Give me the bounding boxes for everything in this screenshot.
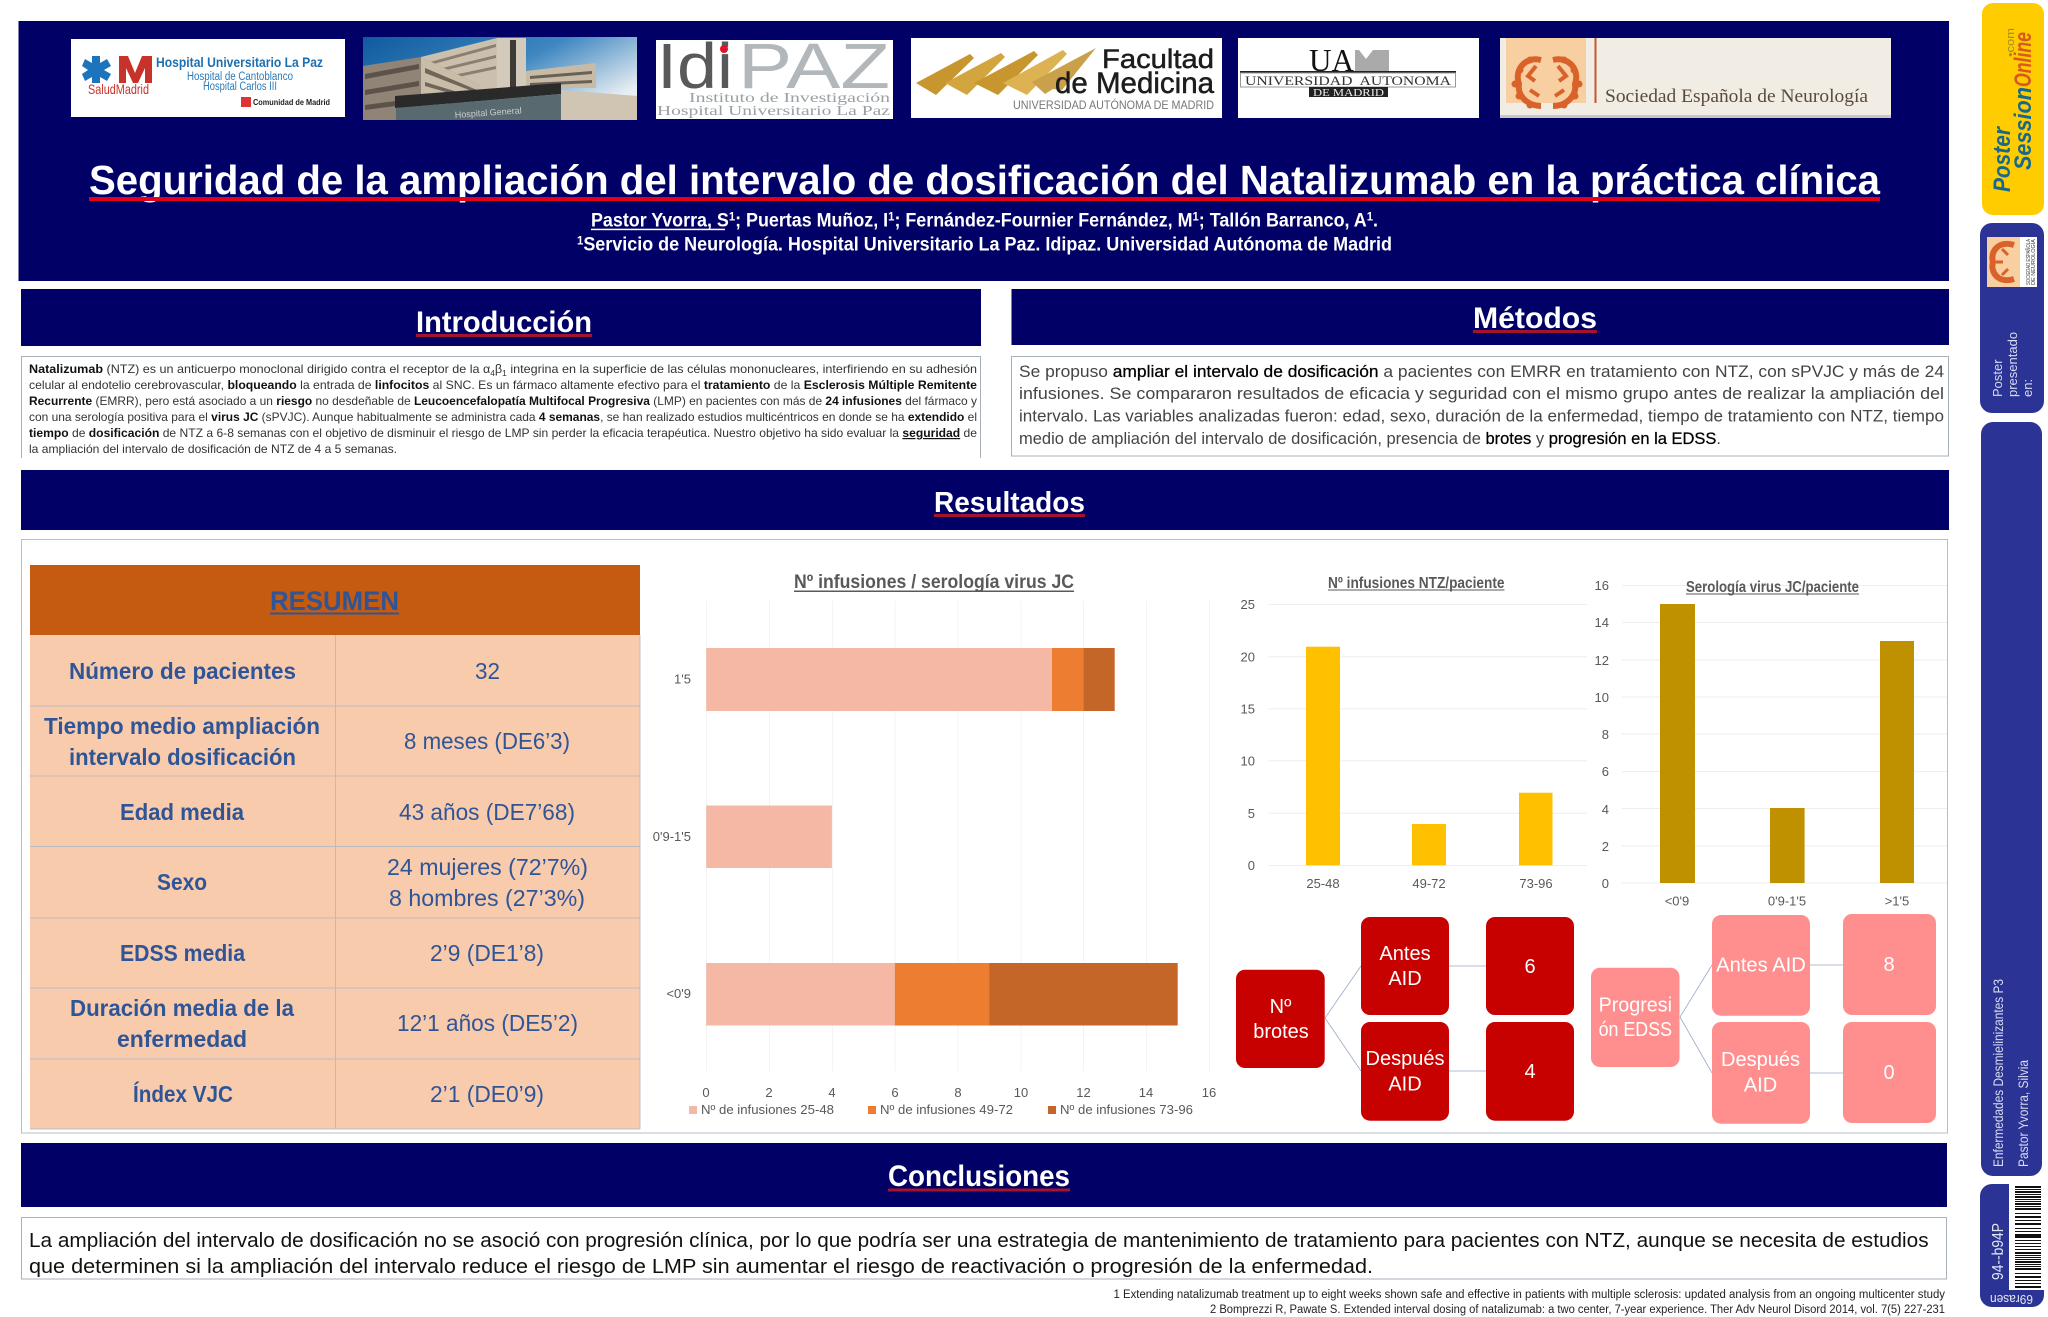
chart: Serología virus JC/paciente: 2 bbox=[1602, 839, 1609, 854]
logo: Universidad Autónoma de Madrid: DE MADRID bbox=[1313, 88, 1384, 99]
table: resumen: Duración media de la bbox=[70, 995, 294, 1021]
chart: Serología virus JC/paciente: 4 bbox=[1602, 802, 1609, 817]
table: resumen: 2’1 (DE0’9) bbox=[430, 1081, 544, 1107]
sidebar: poster presentado en: Poster bbox=[1990, 359, 2005, 397]
chart: Nº infusiones / serología virus JC: 16 bbox=[1202, 1085, 1216, 1100]
logo: IdiPAZ: Idi bbox=[657, 30, 733, 102]
diagram: Nº brotes: 4 bbox=[1524, 1061, 1536, 1083]
sidebar: session and author: Pastor Yvorra, Silvia bbox=[2015, 1060, 2031, 1167]
logo: Sociedad Española de Neurología: Sociedad Española de Neurología bbox=[1605, 86, 1869, 107]
diagram: Progresión EDSS: Después bbox=[1721, 1049, 1800, 1071]
sidebar: session and author bbox=[1981, 422, 2042, 1176]
table: resumen: Número de pacientes bbox=[69, 658, 296, 684]
table: resumen: RESUMEN bbox=[270, 586, 399, 616]
panel: métodos text: infusiones. Se compararon resultados de eficacia y seguridad con el mismo grupo antes de realizar la ampliación del bbox=[1019, 385, 1944, 403]
chart: Nº infusiones / serología virus JC: 10 bbox=[1014, 1085, 1028, 1100]
diagram: Progresión EDSS: AID bbox=[1744, 1075, 1777, 1097]
heading: Introducción bbox=[21, 289, 981, 346]
chart: Nº infusiones / serología virus JC: 12 bbox=[1076, 1085, 1091, 1100]
chart: Nº infusiones / serología virus JC: 6 bbox=[891, 1085, 899, 1100]
panel: conclusiones text bbox=[22, 1218, 1946, 1279]
chart: Serología virus JC/paciente: <0'9 bbox=[1665, 894, 1689, 909]
heading: Resultados: Resultados bbox=[934, 487, 1085, 519]
diagram: Progresión EDSS: 0 bbox=[1883, 1062, 1895, 1084]
diagram: Nº brotes: 6 bbox=[1524, 956, 1536, 978]
chart: Nº infusiones NTZ/paciente: 20 bbox=[1241, 650, 1255, 664]
panel: conclusiones text: La ampliación del intervalo de dosificación no se asoció con progresión clínica, por lo que podría ser una estrategia de mantenimiento de tratamiento para pacientes con NTZ, aunque se necesita de estudios bbox=[29, 1230, 1929, 1252]
logo: IdiPAZ bbox=[656, 30, 893, 119]
heading: Conclusiones: Conclusiones bbox=[888, 1160, 1070, 1193]
header banner bbox=[18, 21, 1949, 281]
panel: introducción text: la ampliación del intervalo de dosificación de NTZ de 4 a 5 semanas. bbox=[29, 442, 397, 456]
panel: métodos text: Se propuso ampliar el intervalo de dosificación a pacientes con EMRR en tratamiento con NTZ, con sPVJC y más de 24 bbox=[1019, 363, 1944, 381]
logo: Hospital Universitario La Paz: Hospital Carlos III bbox=[203, 81, 277, 93]
diagram: Nº brotes: brotes bbox=[1253, 1021, 1309, 1043]
logo: Facultad de Medicina bbox=[911, 38, 1222, 118]
panel: conclusiones text: que determinen si la ampliación del intervalo reduce el riesgo de LMP sin aumentar el riesgo de reactivación o progresión de la enfermedad. bbox=[29, 1256, 1373, 1278]
logo: Facultad de Medicina: Facultad bbox=[1102, 44, 1214, 74]
sidebar: PosterSessionOnline logo: Poster bbox=[1989, 126, 2016, 192]
authors bbox=[591, 210, 1378, 232]
sidebar: session and author: Enfermedades Desmielinizantes P3 bbox=[1990, 979, 2006, 1167]
chart: Nº infusiones / serología virus JC: 1'5 bbox=[674, 672, 691, 686]
chart: Nº infusiones NTZ/paciente: Nº infusiones NTZ/paciente bbox=[1328, 575, 1505, 592]
diagram: Progresión EDSS: Antes AID bbox=[1716, 955, 1806, 977]
logo: Universidad Autónoma de Madrid: UA bbox=[1309, 42, 1354, 78]
legend: Nº de infusiones 25-48 bbox=[701, 1102, 834, 1117]
logo: Universidad Autónoma de Madrid bbox=[1238, 38, 1479, 118]
logo: IdiPAZ: Instituto de Investigación bbox=[689, 91, 890, 106]
table: resumen: Índex VJC bbox=[133, 1080, 233, 1107]
logo: Hospital Universitario La Paz: Hospital Universitario La Paz bbox=[156, 54, 323, 70]
diagram: Progresión EDSS bbox=[1591, 914, 1936, 1124]
table: resumen: intervalo dosificación bbox=[69, 744, 296, 770]
heading: Métodos: Métodos bbox=[1473, 302, 1597, 335]
chart: Nº infusiones NTZ/paciente: 5 bbox=[1248, 806, 1255, 821]
heading: Introducción: Introducción bbox=[416, 306, 592, 339]
chart: Serología virus JC/paciente: 12 bbox=[1595, 653, 1609, 668]
sidebar: PosterSessionOnline logo: Session bbox=[2010, 87, 2037, 170]
panel: introducción text: 4 bbox=[490, 369, 496, 378]
table: resumen: Tiempo medio ampliación bbox=[44, 713, 320, 739]
logo: Hospital Universitario La Paz: Hospital de Cantoblanco bbox=[187, 71, 293, 83]
diagram: Nº brotes: Antes bbox=[1379, 943, 1431, 965]
chart: Nº infusiones NTZ/paciente bbox=[1241, 575, 1587, 891]
chart: Nº infusiones NTZ/paciente: 15 bbox=[1241, 702, 1255, 716]
sidebar: poster presentado en: SOCIEDAD ESPAÑOLA bbox=[2025, 238, 2032, 285]
sidebar: poster presentado en: DE NEUROLOGÍA bbox=[2030, 238, 2037, 285]
legend: Nº de infusiones 73-96 bbox=[1060, 1102, 1193, 1117]
authors: 1 bbox=[1193, 210, 1199, 224]
logo: Universidad Autónoma de Madrid: UNIVERSIDAD AUTONOMA bbox=[1245, 73, 1452, 88]
logo: Facultad de Medicina: de Medicina bbox=[1055, 67, 1214, 100]
authors: ; Tallón Barranco, A bbox=[1199, 211, 1367, 232]
heading: Conclusiones bbox=[21, 1143, 1947, 1207]
authors: . bbox=[1373, 211, 1378, 232]
authors: ; Puertas Muñoz, I bbox=[735, 211, 888, 232]
logo: Hospital Universitario La Paz: SaludMadrid bbox=[88, 81, 149, 97]
table: resumen: 24 mujeres (72’7%) bbox=[387, 854, 588, 880]
table: resumen: 43 años (DE7’68) bbox=[399, 799, 575, 825]
panel: resultados bbox=[22, 540, 1948, 1133]
diagram: Nº brotes: AID bbox=[1388, 1074, 1422, 1096]
authors: ; Fernández-Fournier Fernández, M bbox=[894, 211, 1193, 232]
title: Seguridad de la ampliación del intervalo de dosificación del Natalizumab en la práctica clínica bbox=[89, 157, 1881, 203]
chart: Nº infusiones NTZ/paciente: 25-48 bbox=[1306, 876, 1340, 891]
panel: introducción text: 1 bbox=[502, 369, 507, 378]
table: resumen: enfermedad bbox=[117, 1026, 247, 1052]
diagram: Nº brotes: Nº bbox=[1270, 996, 1292, 1018]
chart: Nº infusiones NTZ/paciente: 49-72 bbox=[1412, 876, 1446, 891]
heading: Resultados bbox=[21, 470, 1949, 530]
chart: Nº infusiones NTZ/paciente: 0 bbox=[1248, 858, 1255, 873]
panel: introducción text: β bbox=[495, 362, 502, 376]
logo: IdiPAZ: PAZ bbox=[738, 30, 890, 102]
diagram: Progresión EDSS: Progresi bbox=[1599, 995, 1672, 1017]
table: resumen: 2’9 (DE1’8) bbox=[430, 940, 544, 966]
authors: 1 bbox=[1367, 210, 1373, 224]
chart: Serología virus JC/paciente: 14 bbox=[1595, 615, 1609, 630]
logo: Facultad de Medicina: UNIVERSIDAD AUTÓNOMA DE MADRID bbox=[1013, 97, 1214, 112]
chart: Serología virus JC/paciente: 0'9-1'5 bbox=[1768, 894, 1806, 909]
table: resumen bbox=[30, 565, 640, 1129]
logo: IdiPAZ: Hospital Universitario La Paz bbox=[657, 104, 890, 119]
diagram: Progresión EDSS: 8 bbox=[1883, 954, 1895, 976]
sidebar: PosterSessionOnline logo bbox=[1982, 3, 2044, 215]
sidebar: PosterSessionOnline logo: Online bbox=[2010, 32, 2037, 87]
diagram: Nº brotes bbox=[1236, 917, 1574, 1121]
chart: Nº infusiones / serología virus JC: 4 bbox=[828, 1085, 836, 1100]
chart: Nº infusiones / serología virus JC: 14 bbox=[1139, 1085, 1153, 1100]
table: resumen: 32 bbox=[475, 658, 500, 684]
table: resumen: EDSS media bbox=[120, 940, 245, 966]
chart: Nº infusiones / serología virus JC bbox=[653, 572, 1216, 1117]
panel: introducción text: con una serología positiva para el virus JC (sPVJC). Aunque habitualmente se administra cada 4 semanas, se han realizado estudios multicéntricos en donde se ha extendido el bbox=[29, 410, 977, 424]
panel: introducción text: celular al endotelio cerebrovascular, bloqueando la entrada de linfocitos al SNC. Es un fármaco altamente efectivo para el tratamiento de la Esclerosis Múltiple Remitente bbox=[29, 378, 977, 392]
diagram: Nº brotes: Después bbox=[1366, 1048, 1444, 1070]
chart: Serología virus JC/paciente: Serología virus JC/paciente bbox=[1686, 579, 1859, 596]
references: 2 Bomprezzi R, Pawate S. Extended interval dosing of natalizumab: a two center, 7-year experience. Ther Adv Neurol Disord 2014, vol. 7(5) 227-231 bbox=[1210, 1304, 1945, 1316]
sidebar: poster presentado en: presentado bbox=[2005, 332, 2020, 397]
logo: photo of hospital building: Hospital General bbox=[454, 105, 522, 120]
affiliation: Servicio de Neurología. Hospital Universitario La Paz. Idipaz. Universidad Autónoma de Madrid bbox=[583, 235, 1392, 256]
chart: Nº infusiones / serología virus JC: Nº infusiones / serología virus JC bbox=[794, 572, 1074, 593]
logo: Sociedad Española de Neurología bbox=[1500, 38, 1891, 118]
panel: métodos text: intervalo. Las variables analizadas fueron: edad, sexo, duración de la enfermedad, tiempo de tratamiento con NTZ, tiempo bbox=[1019, 408, 1944, 426]
chart: Nº infusiones NTZ/paciente: 10 bbox=[1241, 754, 1255, 768]
chart: Serología virus JC/paciente: 10 bbox=[1595, 690, 1609, 705]
legend: Nº de infusiones 49-72 bbox=[880, 1102, 1013, 1117]
chart: Serología virus JC/paciente bbox=[1595, 578, 1947, 909]
logo: Hospital Universitario La Paz: Comunidad de Madrid bbox=[253, 98, 330, 107]
table: resumen: 8 meses (DE6’3) bbox=[404, 728, 570, 754]
panel: métodos text: medio de ampliación del intervalo de dosificación, presencia de brotes y progresión en la EDSS. bbox=[1019, 430, 1721, 448]
panel: métodos text bbox=[1012, 356, 1948, 456]
references bbox=[1114, 1289, 1945, 1316]
panel: introducción text: tiempo de dosificación de NTZ a 6-8 semanas con el objetivo de disminuir el riesgo de LMP sin perder la eficacia terapéutica. Nuestro objetivo ha sido evaluar la seguridad de bbox=[29, 426, 977, 440]
authors: 1 bbox=[888, 210, 895, 224]
sidebar: poster presentado en bbox=[1980, 223, 2044, 413]
table: resumen: 8 hombres (27’3%) bbox=[389, 885, 585, 911]
chart: Nº infusiones NTZ/paciente: 73-96 bbox=[1519, 876, 1553, 891]
diagram: Progresión EDSS: ón EDSS bbox=[1599, 1019, 1672, 1041]
authors: 1 bbox=[729, 210, 735, 224]
logo: Hospital Universitario La Paz bbox=[71, 39, 345, 117]
authors: Pastor Yvorra, S bbox=[591, 211, 737, 232]
chart: Serología virus JC/paciente: 16 bbox=[1595, 578, 1609, 593]
chart: Nº infusiones / serología virus JC: 8 bbox=[954, 1085, 962, 1100]
sidebar: PosterSessionOnline logo: •com bbox=[2005, 28, 2017, 57]
chart: Nº infusiones / serología virus JC: 0'9-1'5 bbox=[653, 829, 691, 844]
table: resumen: Sexo bbox=[157, 869, 207, 895]
sidebar: barcode bbox=[1980, 1184, 2044, 1307]
sidebar: poster presentado en: en: bbox=[2020, 379, 2035, 397]
sidebar: barcode: 69rasen bbox=[1990, 1292, 2033, 1307]
chart: Nº infusiones / serología virus JC: 2 bbox=[765, 1085, 773, 1100]
panel: introducción text: Natalizumab (NTZ) es un anticuerpo monoclonal dirigido contra el receptor de la α bbox=[29, 362, 473, 376]
chart: Serología virus JC/paciente: 0 bbox=[1602, 876, 1609, 891]
chart: Serología virus JC/paciente: >1'5 bbox=[1885, 894, 1909, 909]
chart: Nº infusiones / serología virus JC: 0 bbox=[702, 1085, 710, 1100]
panel: introducción text bbox=[22, 356, 980, 458]
affiliation: 1 bbox=[577, 234, 584, 248]
legend bbox=[689, 1102, 1193, 1117]
chart: Nº infusiones / serología virus JC: <0'9 bbox=[666, 986, 691, 1001]
chart: Nº infusiones NTZ/paciente: 25 bbox=[1241, 597, 1255, 612]
table: resumen: 12’1 años (DE5’2) bbox=[397, 1010, 578, 1036]
references: 1 Extending natalizumab treatment up to eight weeks shown safe and effective in patients with multiple sclerosis: updated analysis from an ongoing multicenter study bbox=[1114, 1289, 1945, 1301]
panel: introducción text: integrina en la superficie de las células mononucleares, interfiriendo en su adhesión bbox=[507, 362, 977, 376]
panel: introducción text: Recurrente (EMRR), pero está asociado a un riesgo no desdeñable de Leucoencefalopatía Multifocal Progresiva (LMP) en pacientes con más de 24 infusiones del fármaco y bbox=[29, 394, 977, 408]
logo: photo of hospital building bbox=[363, 37, 637, 120]
chart: Serología virus JC/paciente: 8 bbox=[1602, 727, 1609, 742]
heading: Métodos bbox=[1012, 289, 1949, 345]
diagram: Nº brotes: AID bbox=[1388, 968, 1422, 990]
table: resumen: Edad media bbox=[120, 799, 244, 825]
chart: Serología virus JC/paciente: 6 bbox=[1602, 764, 1609, 779]
sidebar: barcode: 94--b94P bbox=[1990, 1223, 2007, 1280]
